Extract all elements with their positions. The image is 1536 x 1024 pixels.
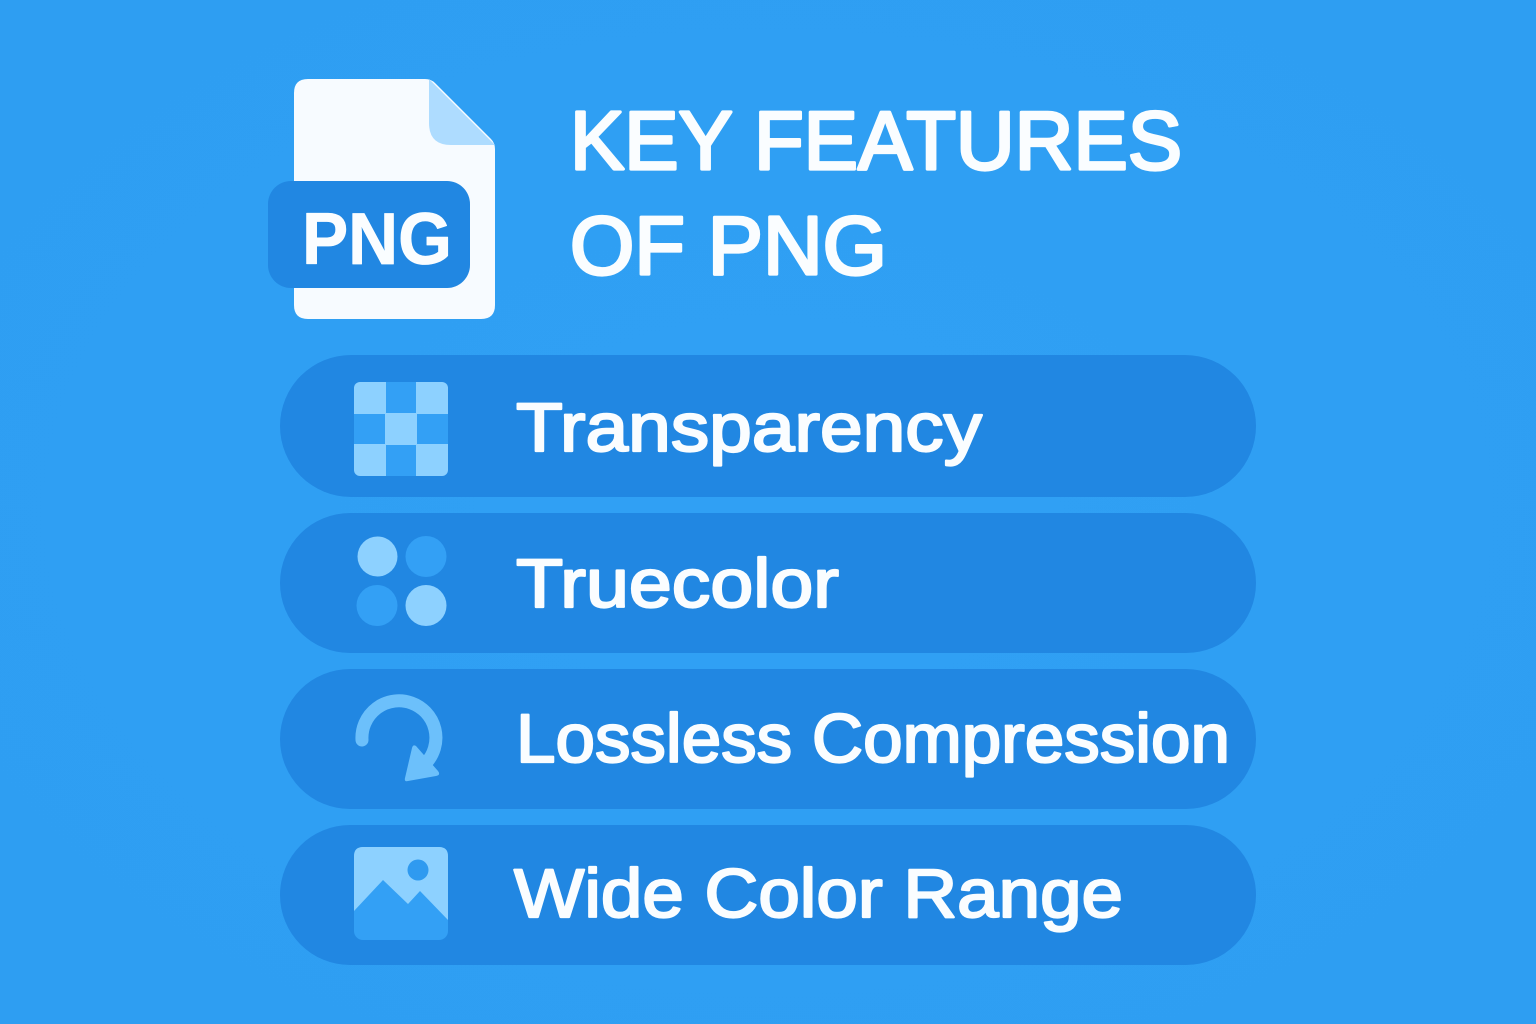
title: KEY FEATURES [570, 94, 1182, 187]
icon: four circles [356, 536, 446, 626]
label: Lossless Compression: Lossless Compression [516, 700, 1230, 777]
icon: image [354, 847, 448, 940]
label: Transparency: Transparency [516, 389, 983, 466]
panel: Truecolor [280, 513, 1256, 653]
panel: Lossless Compression [280, 669, 1256, 809]
icon: checkerboard [354, 382, 448, 476]
label: Truecolor: Truecolor [516, 545, 839, 622]
label: Wide Color Range: Wide Color Range [514, 855, 1123, 932]
title [570, 94, 1182, 292]
icon: PNG file [268, 79, 495, 319]
PNG badge: PNG [302, 199, 452, 280]
panel: Wide Color Range [280, 825, 1256, 965]
folded corner [429, 79, 495, 145]
PNG badge [268, 181, 470, 288]
file page [294, 79, 495, 319]
title: OF PNG [570, 199, 887, 292]
icon: circular arrow [362, 701, 439, 781]
panel: Transparency [280, 355, 1256, 497]
